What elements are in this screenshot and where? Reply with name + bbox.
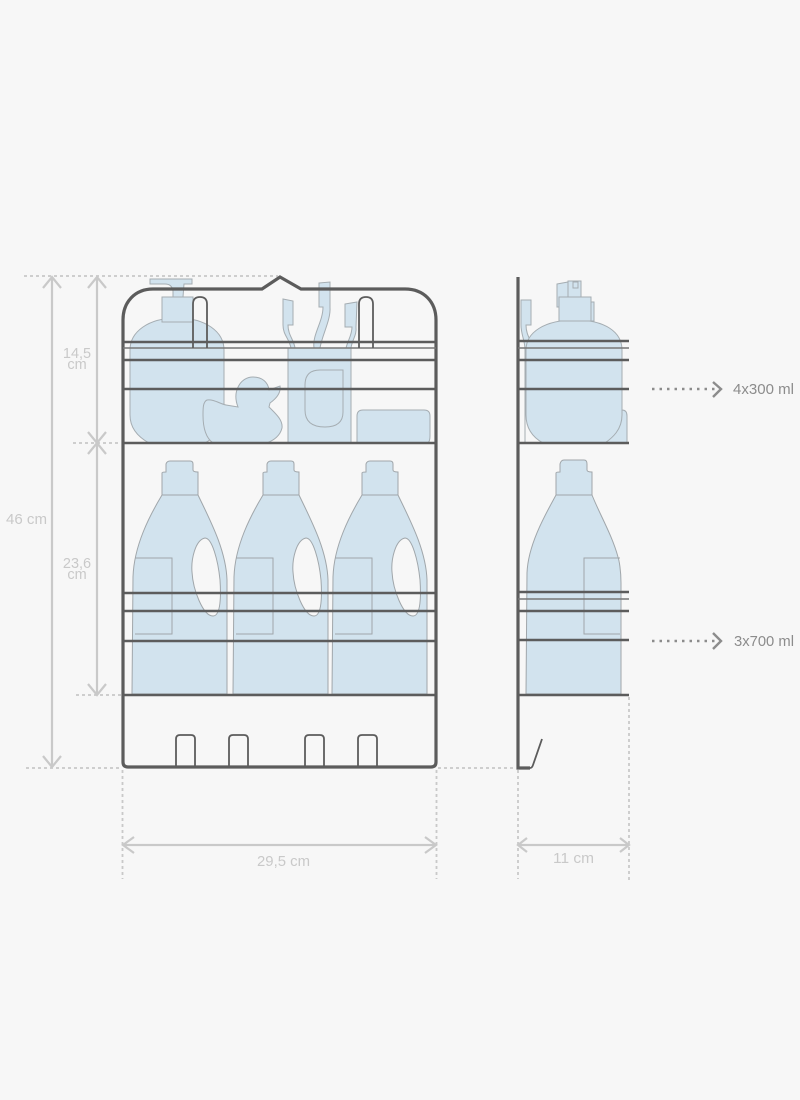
dimension: lower height 23,6 cm bbox=[63, 443, 106, 695]
callout: 4x300 ml bbox=[652, 381, 794, 398]
dimension: upper height 14,5 cm: 14,5 bbox=[63, 346, 91, 362]
dimension: lower height 23,6 cm: 23,6 bbox=[63, 556, 91, 572]
dimension: upper height 14,5 cm bbox=[63, 277, 106, 443]
dimension: upper height 14,5 cm: cm bbox=[67, 357, 87, 373]
large bottle 2 bbox=[233, 461, 328, 694]
callout: 4x300 ml: 4x300 ml bbox=[733, 381, 794, 398]
callout: 3x700 ml: 3x700 ml bbox=[734, 633, 794, 650]
dimension: total height 46 cm bbox=[6, 277, 61, 767]
pump bottle bbox=[130, 279, 224, 443]
callout: 3x700 ml bbox=[652, 633, 794, 650]
side frame bbox=[518, 277, 629, 768]
dimension: depth 11 cm bbox=[518, 838, 629, 867]
side view bbox=[518, 277, 629, 768]
large bottle 3 bbox=[332, 461, 427, 694]
dimension: width 29,5 cm bbox=[123, 837, 436, 870]
shelf frame bbox=[123, 277, 436, 767]
soap bar bbox=[357, 410, 430, 443]
side items upper bbox=[521, 281, 627, 443]
dimension: total height 46 cm: 46 cm bbox=[6, 511, 47, 528]
toothbrush cup bbox=[288, 348, 351, 443]
dimension: depth 11 cm: 11 cm bbox=[553, 850, 594, 867]
dimension: width 29,5 cm: 29,5 cm bbox=[257, 853, 310, 870]
rubber duck bbox=[203, 377, 282, 443]
front view bbox=[123, 277, 436, 767]
toothbrushes bbox=[283, 282, 357, 348]
dimension: lower height 23,6 cm: cm bbox=[67, 567, 87, 583]
side items lower bottle bbox=[526, 460, 621, 694]
large bottle 1 bbox=[132, 461, 227, 694]
